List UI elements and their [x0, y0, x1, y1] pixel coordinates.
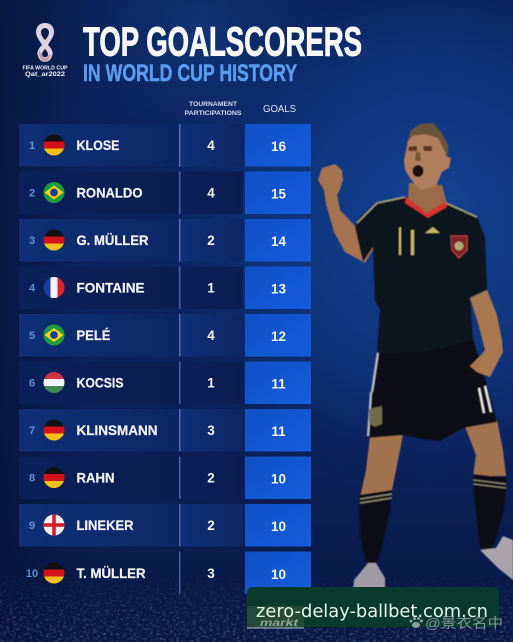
- column header: goals: GOALS: [263, 104, 296, 115]
- row 8: Rahn: 2: [207, 470, 215, 486]
- collar: [405, 197, 447, 218]
- row 10: T. Müller: 10: [271, 567, 286, 582]
- row 3: G. Müller: [19, 219, 311, 262]
- row 4: Fontaine: 13: [271, 282, 286, 296]
- right boot: [480, 536, 513, 580]
- shirt number 11: [399, 227, 414, 255]
- row 9: Lineker: LINEKER: [76, 517, 134, 533]
- row 3: G. Müller: 3: [29, 235, 35, 247]
- title: TOP GOALSCORERS: [83, 18, 362, 64]
- row 9: Lineker: [19, 504, 311, 546]
- row 1: Klose: KLOSE: [76, 137, 120, 153]
- Germany crest: [451, 236, 467, 258]
- row 9: Lineker: 10: [271, 519, 286, 534]
- row 4: Fontaine: FONTAINE: [76, 280, 144, 296]
- row 3: G. Müller: G. MÜLLER: [76, 232, 148, 248]
- table of goalscorers: [19, 124, 311, 594]
- right sock: [473, 474, 507, 549]
- row 6: Kocsis: 11: [271, 376, 286, 392]
- row 10: T. Müller: 10: [26, 568, 38, 580]
- row 5: Pelé: 4: [207, 328, 215, 343]
- row 6: Kocsis: KOCSIS: [76, 374, 124, 390]
- logo: FIFA World Cup Qatar 2022: FIFA WORLD CUP: [22, 66, 68, 72]
- row 4: Fontaine: [19, 266, 311, 309]
- row 7: Klinsmann: KLINSMANN: [76, 422, 158, 438]
- row 8: Rahn: 10: [271, 472, 286, 486]
- row 7: Klinsmann: [19, 409, 311, 452]
- row 1: Klose: 1: [29, 140, 35, 152]
- eyes: [408, 146, 432, 151]
- row 10: T. Müller: [26, 552, 311, 594]
- watermark: social handle: @景衣名中: [425, 615, 503, 631]
- right leg: [464, 420, 506, 476]
- shorts: [367, 340, 497, 441]
- row 2: Ronaldo: RONALDO: [76, 184, 143, 200]
- row 6: Kocsis: [19, 362, 311, 404]
- overlay banner: site url: markt: [260, 617, 299, 629]
- row 6: Kocsis: 1: [207, 376, 215, 390]
- row 10: T. Müller: 3: [207, 566, 215, 581]
- shoulder trim: [357, 197, 477, 223]
- raised left arm and fist: [318, 164, 375, 263]
- left sock: [359, 490, 392, 566]
- subtitle: IN WORLD CUP HISTORY: [83, 60, 297, 87]
- nose: [415, 152, 421, 161]
- row 7: Klinsmann: 3: [207, 423, 215, 438]
- right arm: [470, 290, 503, 377]
- row 4: Fontaine: 1: [207, 280, 215, 296]
- row 1: Klose: 16: [271, 139, 286, 154]
- row 1: Klose: [19, 124, 311, 166]
- column header: tournament participations: [184, 101, 242, 117]
- row 9: Lineker: 9: [29, 520, 35, 532]
- adidas mark: [425, 227, 440, 233]
- row 8: Rahn: [19, 456, 311, 499]
- row 8: Rahn: RAHN: [76, 470, 114, 486]
- open mouth: [412, 165, 424, 177]
- row 3: G. Müller: 14: [271, 234, 286, 249]
- row 10: T. Müller: T. MÜLLER: [76, 565, 146, 581]
- shirt: [355, 197, 487, 353]
- neck: [408, 183, 447, 216]
- row 7: Klinsmann: 11: [271, 424, 286, 439]
- row 5: Pelé: 12: [271, 329, 286, 344]
- row 1: Klose: 4: [207, 138, 215, 153]
- row 8: Rahn: 8: [29, 472, 35, 484]
- left boot: [353, 563, 385, 590]
- logo: FIFA World Cup Qatar 2022: Qat_ar2022: [25, 71, 65, 78]
- row 2: Ronaldo: 4: [207, 186, 215, 200]
- left leg: [360, 435, 403, 497]
- logo: FIFA World Cup Qatar 2022: [22, 23, 68, 78]
- player: celebrating striker in black Germany kit: [318, 123, 513, 590]
- hair: [407, 123, 448, 157]
- overlay banner: site url: zero-delay-ballbet.com.cn: [256, 601, 488, 622]
- row 5: Pelé: PELÉ: [76, 327, 110, 343]
- row 3: G. Müller: 2: [207, 233, 215, 248]
- column header: tournament participations: PARTICIPATIONS: [184, 110, 242, 117]
- row 9: Lineker: 2: [207, 518, 215, 533]
- overlay banner: site url: [247, 587, 499, 629]
- icon: paw: [410, 617, 423, 628]
- row 2: Ronaldo: 2: [29, 188, 35, 200]
- row 4: Fontaine: 4: [29, 282, 36, 294]
- row 2: Ronaldo: [19, 172, 311, 214]
- head: [404, 130, 451, 190]
- column header: tournament participations: TOURNAMENT: [189, 101, 237, 108]
- row 5: Pelé: 5: [29, 330, 35, 342]
- row 5: Pelé: [19, 314, 311, 356]
- row 2: Ronaldo: 15: [271, 186, 286, 202]
- row 6: Kocsis: 6: [29, 378, 35, 390]
- row 7: Klinsmann: 7: [29, 425, 35, 437]
